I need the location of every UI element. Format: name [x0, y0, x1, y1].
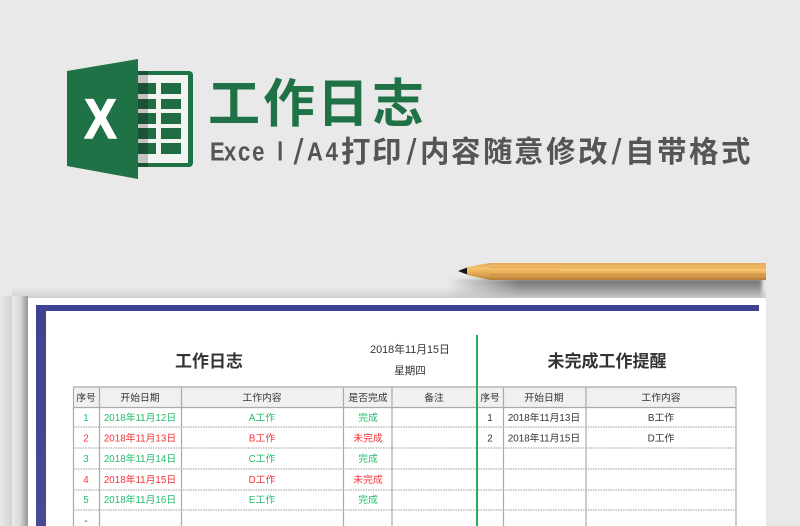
weekday: 星期四: [394, 365, 426, 377]
table header: 是否完成: [348, 391, 388, 404]
subtitle: 打印内容随意修改自带格式: [341, 136, 751, 169]
row 2: 2: [83, 434, 89, 444]
row 2: 未完成: [353, 432, 383, 444]
row 4: 未完成: [353, 473, 383, 486]
row 4: [83, 473, 383, 486]
title: 工作日志: [208, 76, 424, 134]
subtitle: ExcelA4: [210, 138, 338, 167]
row 1: 1: [83, 413, 89, 424]
row 5: 5: [83, 495, 89, 506]
heading: unfinished reminder: 未完成工作提醒: [548, 351, 666, 371]
table header: 序号: [480, 391, 500, 404]
row 3: [83, 452, 378, 465]
pencil: [458, 263, 766, 280]
row 2: 2018年11月13日: [104, 432, 176, 444]
table header: 开始日期: [120, 391, 160, 404]
row 1: [83, 411, 378, 424]
reminder row 2: [487, 432, 675, 444]
subtitle: ///: [294, 131, 622, 172]
row 1: 完成: [358, 411, 378, 424]
paper sheet: [28, 298, 766, 526]
table header: 备注: [424, 391, 444, 404]
row 3: 2018年11月14日: [104, 452, 176, 465]
green divider: [476, 335, 478, 526]
reminder row 1: 1: [487, 413, 493, 424]
paper shadow behind pencil: [446, 279, 762, 299]
blue frame: [36, 305, 759, 526]
back sheet edge: [12, 296, 28, 526]
row 1: A工作: [249, 412, 275, 424]
header background: [73, 387, 736, 407]
row 5: [83, 493, 378, 506]
outer sheet shadow: [0, 296, 12, 526]
table: work log and reminder: [73, 387, 736, 526]
current date: 2018年11月15日: [370, 342, 450, 356]
subtitle: [210, 131, 751, 172]
reminder row 2: D工作: [648, 432, 675, 444]
reminder row 2: 2: [487, 434, 493, 444]
row 3: 3: [83, 454, 89, 465]
row 5: E工作: [249, 494, 275, 506]
table header: 工作内容: [242, 391, 282, 404]
table header: 工作内容: [641, 391, 681, 404]
reminder row 1: [487, 411, 674, 424]
row 4: 2018年11月15日: [104, 473, 176, 486]
reminder row 1: 2018年11月13日: [508, 411, 580, 424]
reminder row 2: 2018年11月15日: [508, 432, 580, 444]
row 3: C工作: [249, 453, 276, 465]
table header: 序号: [76, 391, 96, 404]
row 2: [83, 432, 383, 444]
row 2: B工作: [249, 432, 275, 444]
heading: work log: 工作日志: [175, 352, 243, 371]
band of shade above the sheet: [12, 287, 766, 298]
reminder row 1: B工作: [648, 412, 674, 424]
row 3: 完成: [358, 452, 378, 465]
row 5: 完成: [358, 493, 378, 506]
row 4: 4: [83, 475, 89, 486]
table header: [76, 391, 681, 404]
row 1: 2018年11月12日: [104, 411, 176, 424]
row 4: D工作: [249, 474, 276, 486]
table header: 开始日期: [524, 391, 564, 404]
row 5: 2018年11月16日: [104, 493, 176, 506]
icon: excel logo: [67, 59, 193, 179]
icon: excel logo: X: [84, 87, 116, 150]
